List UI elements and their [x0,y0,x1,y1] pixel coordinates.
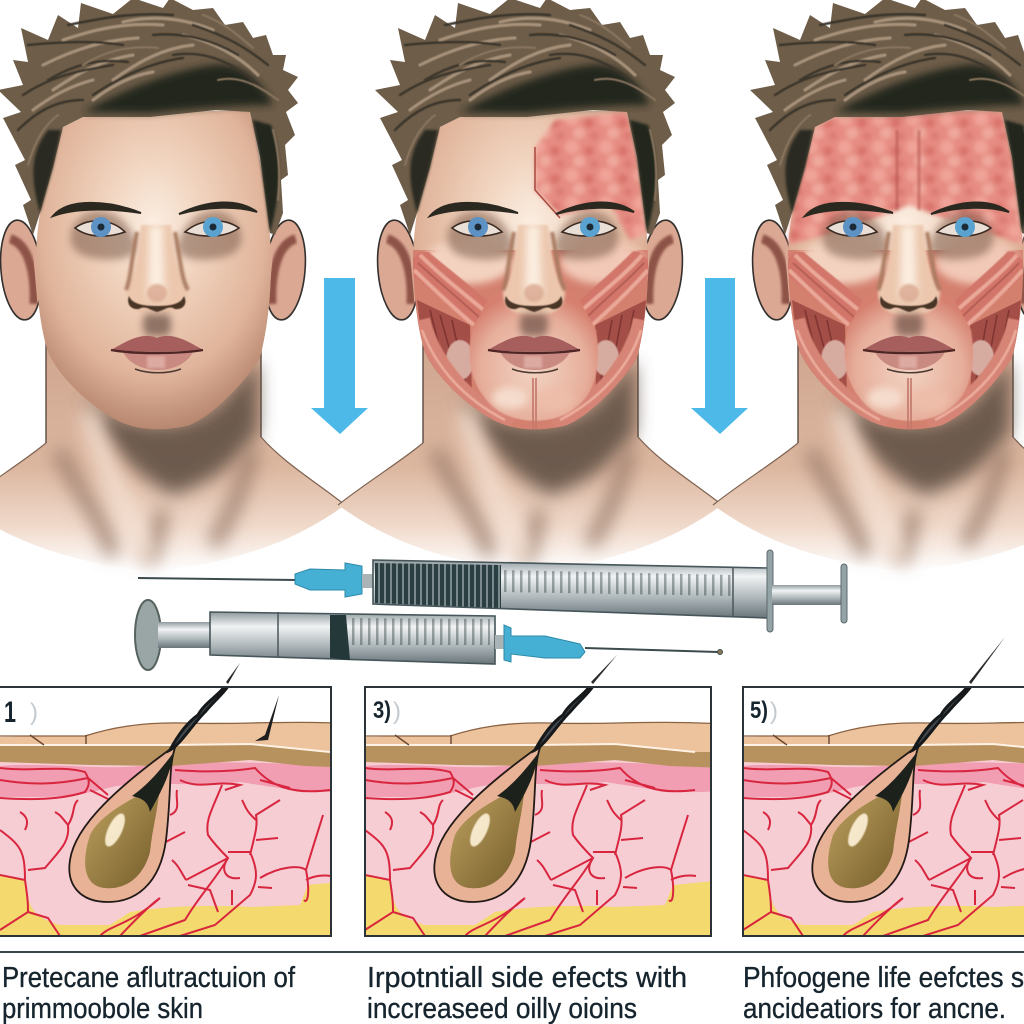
panel 3 number: 5) [750,697,768,724]
panel 1 number: 1 [4,696,16,729]
caption 2 [367,962,687,1024]
arrow 2 [691,278,748,434]
lower syringe [135,600,722,670]
panel 1 bracket: ) [30,699,38,726]
face portrait 2: muscle exposed with partial skin damage [338,0,722,572]
upper syringe [138,550,847,632]
divider rule [0,951,1024,953]
face portrait 1: healthy skin [0,0,345,572]
caption 2: Irpotntiall side efects with [367,962,687,994]
panel 3 bracket: ) [770,698,778,725]
caption 1 [2,962,296,1024]
caption 1: Pretecane aflutractuion of [2,962,296,994]
caption 3 [743,962,1024,1024]
panel 2 number: 3) [373,697,391,724]
panel 2: skin cross-section [365,655,725,937]
panel 2 bracket: ) [393,698,401,725]
arrow 1 [311,278,368,434]
face portrait 3: full damage [713,0,1024,572]
panel 1 small hair [255,695,279,741]
panel 1: skin cross-section [0,663,360,937]
panel 3: skin cross-section [743,637,1024,937]
